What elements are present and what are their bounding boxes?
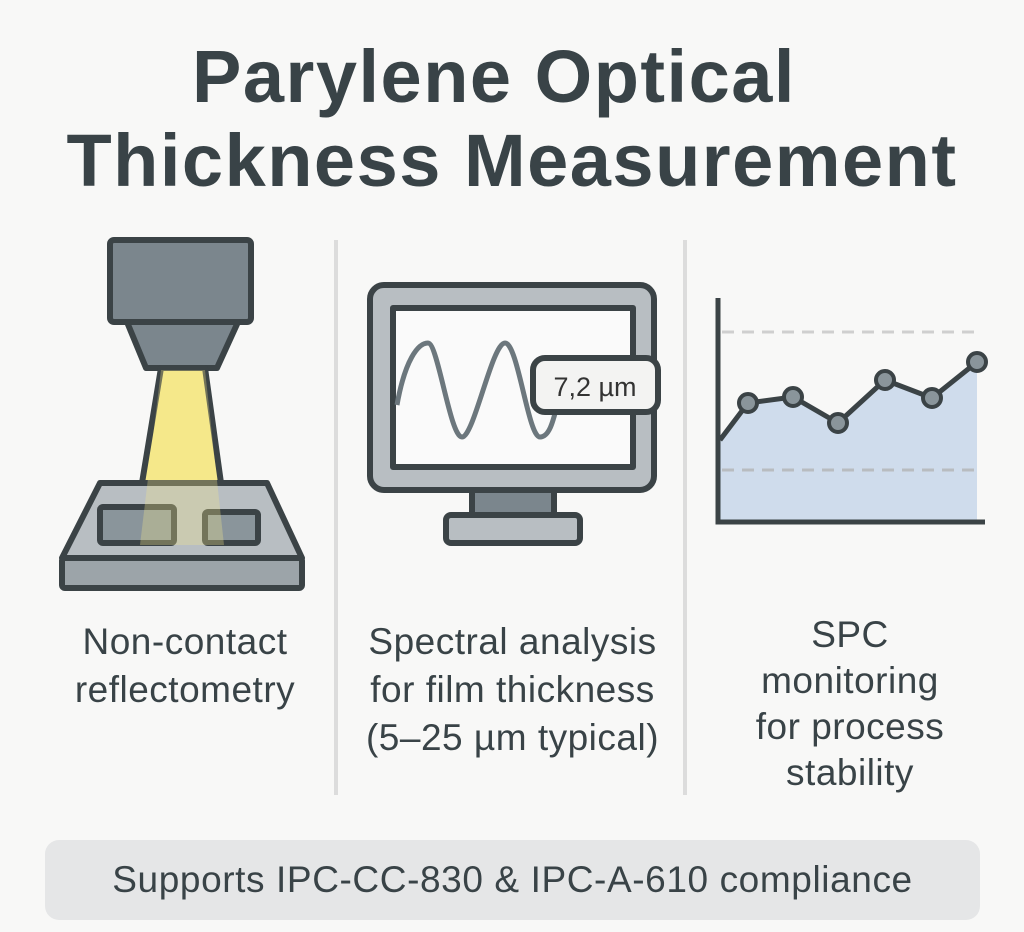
text: SPC xyxy=(756,614,944,793)
text: SPC: SPC xyxy=(811,614,889,655)
text: reflectometry: reflectometry xyxy=(75,669,295,710)
text: reflectometry: Non-contact xyxy=(82,621,288,662)
title xyxy=(66,35,958,202)
chart: SPC xyxy=(718,298,986,522)
icon: monitor: 7,2 µm xyxy=(553,372,637,402)
text: spectral: Spectral analysis xyxy=(368,621,657,662)
text: spectral: for film thickness xyxy=(370,669,655,710)
text: reflectometry xyxy=(75,621,295,710)
text: SPC: monitoring xyxy=(761,660,939,701)
text: spectral xyxy=(366,621,659,758)
footer banner: Supports IPC-CC-830 & IPC-A-610 compliance xyxy=(112,859,913,900)
title: Thickness Measurement xyxy=(66,119,958,202)
icon: reflectometer xyxy=(62,240,302,588)
text: SPC: stability xyxy=(786,752,914,793)
text: SPC: for process xyxy=(756,706,944,747)
footer banner xyxy=(45,840,980,920)
text: spectral: (5–25 µm typical) xyxy=(366,717,659,758)
icon: monitor xyxy=(370,285,658,543)
title: Parylene Optical xyxy=(192,35,796,118)
